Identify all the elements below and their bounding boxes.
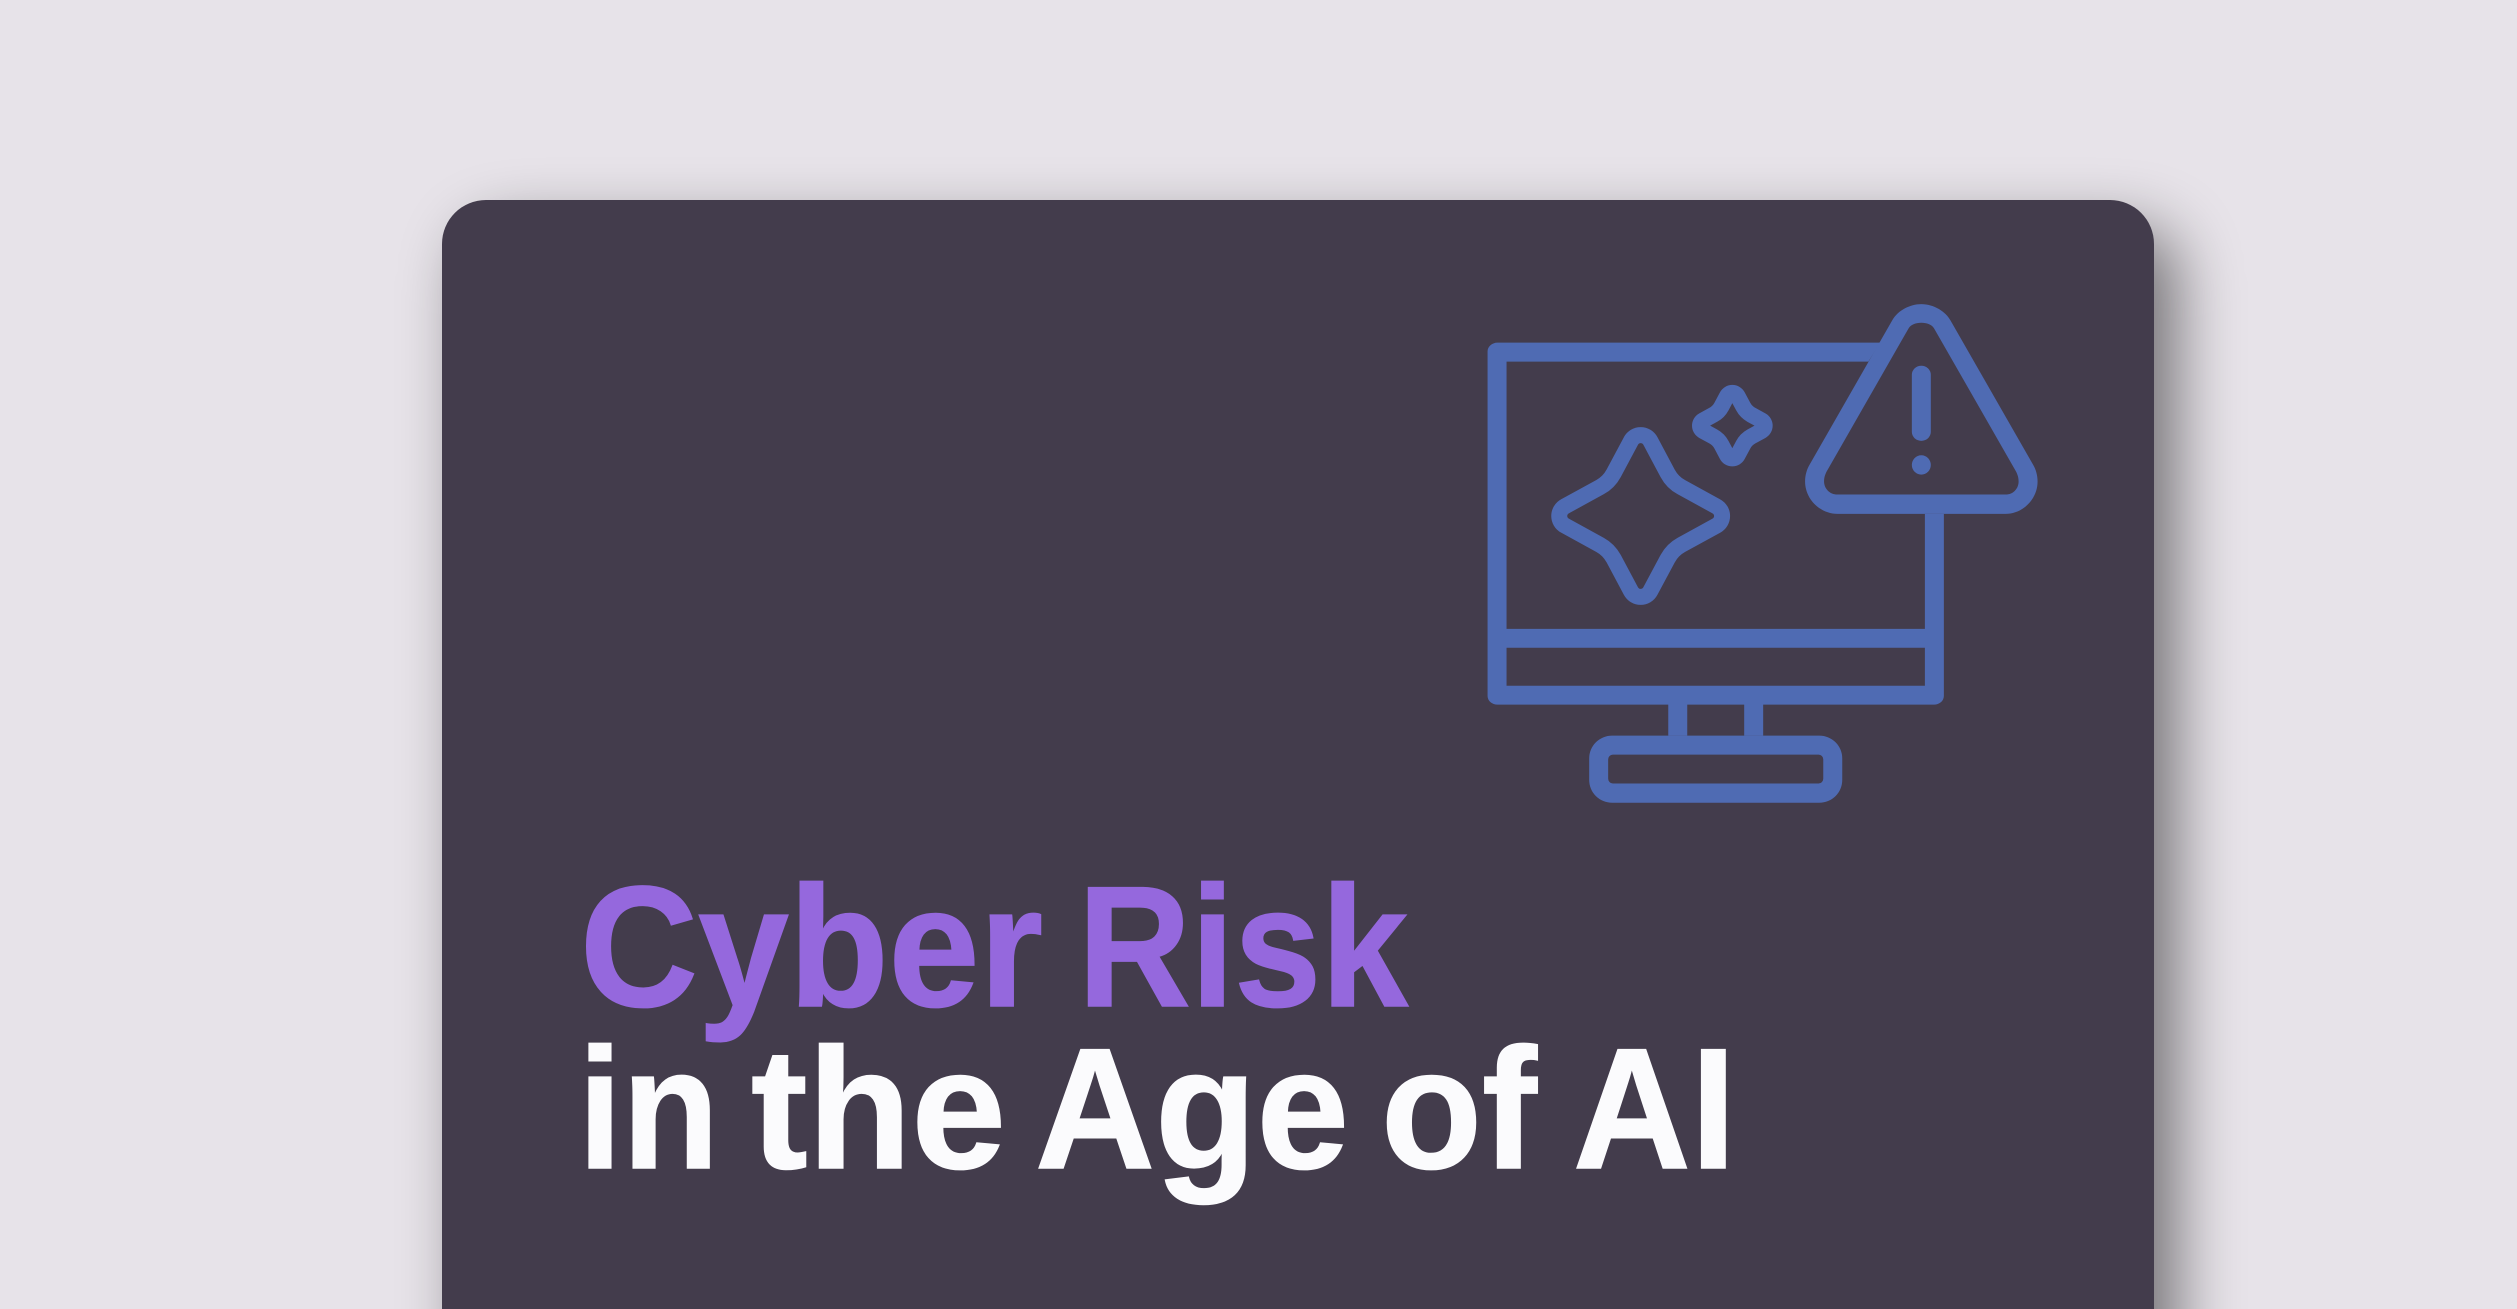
title line 2: in the Age of AI: of [1381,1013,1538,1205]
icon: monitor with sparkles and warning triangle [1488,304,2038,803]
panel: dark card [442,200,2154,1309]
monitor frame [1488,343,1944,736]
title line 2: in the Age of AI: Age [1035,1013,1349,1205]
title line 1: Cyber Risk: Risk [1078,851,1408,1043]
monitor base [1589,736,1842,803]
warning triangle [1805,304,2038,514]
exclamation mark [1912,366,1931,475]
title line 2: in the Age of AI: in [578,1013,719,1205]
title line 1: Cyber Risk: Cyber [580,851,1043,1043]
large sparkle [1559,435,1722,597]
title line 2: in the Age of AI: the [751,1013,1006,1205]
small sparkle [1700,393,1765,458]
title line 2: in the Age of AI: AI [1573,1013,1736,1205]
